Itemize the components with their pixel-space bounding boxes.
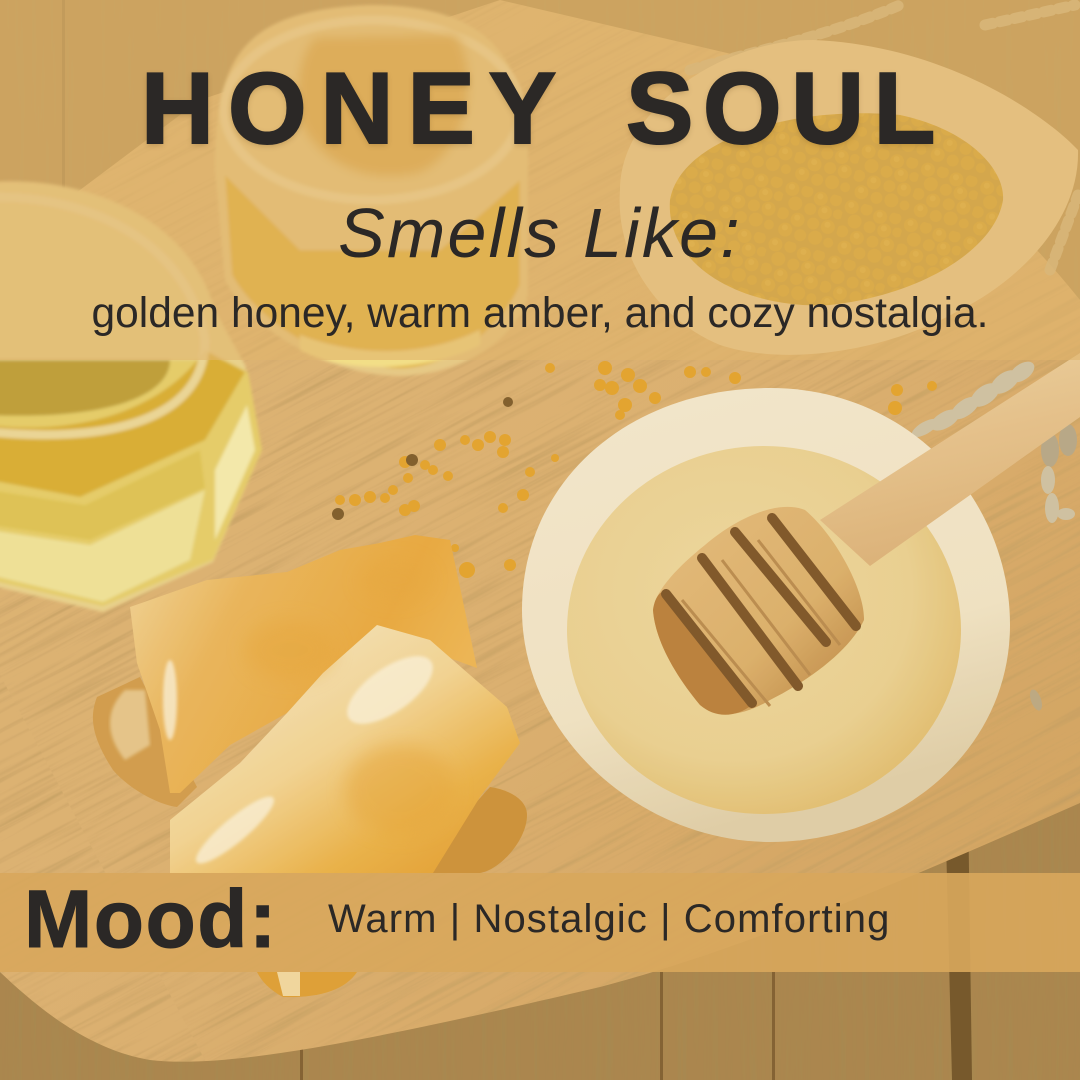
lavender behind pollen bowl [690,5,1078,270]
pollen bowl [620,40,1078,355]
honey dipper [653,353,1080,715]
mood band overlay [0,873,1080,972]
honeycomb back [130,535,477,793]
white honey bowl [522,388,1010,842]
title: SOUL [626,53,945,165]
mood label: Mood: [24,874,278,965]
top text panel overlay [0,0,1080,360]
top jar [215,5,528,376]
lavender sprigs [909,357,1077,712]
honey jar left [0,181,262,612]
honeycomb front [170,625,520,873]
scattered pollen [332,361,937,578]
honey spill [93,677,527,997]
mood values: Warm | Nostalgic | Comforting [328,897,890,941]
title [141,53,945,165]
subtitle: Smells Like: Smells Like: [338,194,742,272]
title: HONEY [141,53,570,165]
scent description: golden honey, warm amber, and cozy nostalgia. [92,290,988,337]
